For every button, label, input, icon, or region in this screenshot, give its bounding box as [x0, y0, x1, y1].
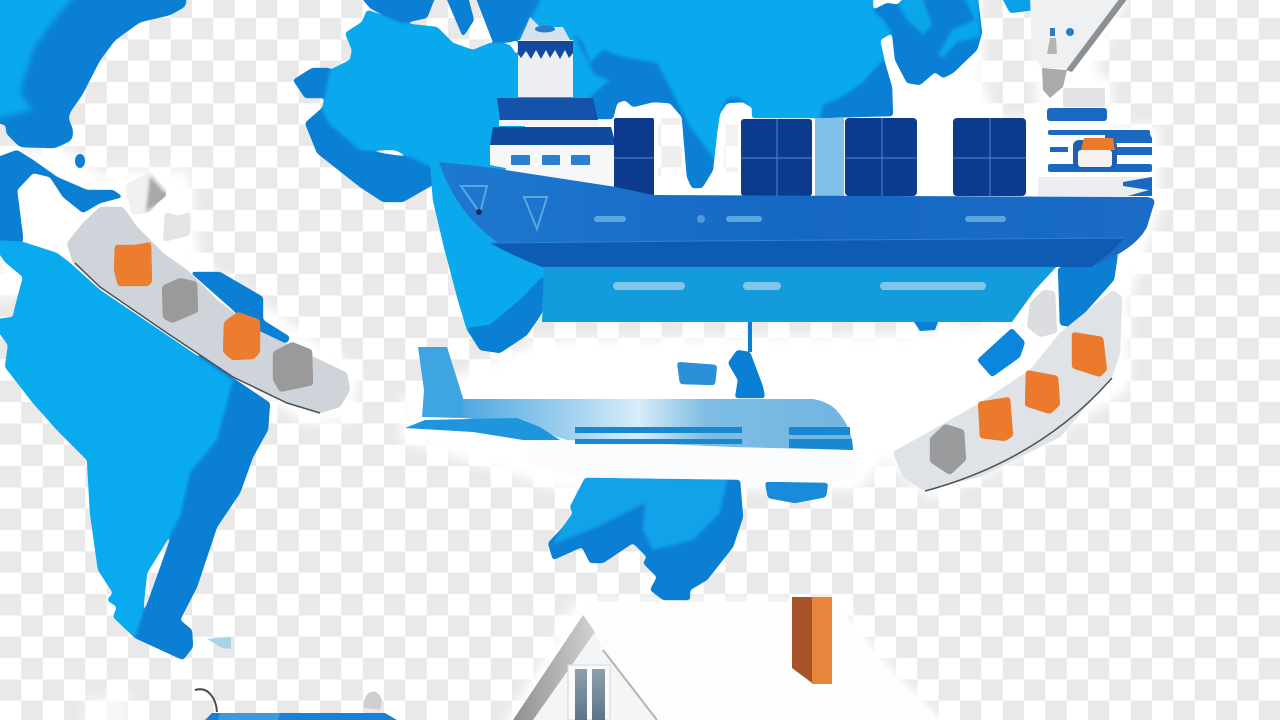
gable: [513, 615, 657, 720]
plane tail: [418, 347, 463, 418]
grey pillar parcel: [1027, 290, 1057, 337]
cargo plane: [405, 322, 858, 486]
gable window: [568, 665, 610, 720]
plane window panel: [677, 362, 717, 385]
map: South America: [0, 240, 270, 660]
orange parcel: [1025, 370, 1060, 414]
hull: [439, 162, 1154, 267]
conveyor tray: [67, 207, 350, 413]
container ship: [439, 17, 1154, 322]
map: North America: [0, 0, 186, 148]
fuselage stripes: [575, 427, 853, 450]
map: Central America: [0, 150, 123, 263]
fuselage: [463, 399, 853, 450]
map: Australia: [548, 478, 828, 600]
blue map fragment: [977, 328, 1025, 377]
plane white belly: [520, 438, 858, 486]
map: Caribbean islet: [75, 154, 85, 168]
bridge: [490, 98, 618, 190]
orange parcel: [978, 397, 1013, 441]
orange parcel: [223, 312, 260, 360]
map: Eurasia and Africa: [293, 0, 1118, 353]
orange parcel: [1072, 332, 1107, 377]
upper right conveyor fragment: [1030, 0, 1128, 98]
funnel: [518, 17, 573, 97]
grey parcel: [273, 342, 313, 392]
delivery van roof: [195, 689, 397, 720]
orange parcel: [114, 242, 152, 286]
stern structure: [1038, 88, 1152, 196]
left conveyor with cargo: [67, 172, 350, 413]
grey parcel: [930, 424, 966, 475]
right conveyor with cargo: [893, 280, 1122, 491]
grey parcel: [162, 278, 198, 323]
white and grey parcels: [125, 172, 190, 242]
dark tail fragment: [728, 350, 765, 398]
chimney: [792, 597, 832, 684]
conveyor tray: [893, 290, 1122, 490]
roof: [587, 602, 945, 720]
containers: [614, 118, 1026, 196]
house: [513, 597, 945, 720]
checkerboard showing through gaps near India: [658, 118, 738, 176]
pale island fragment: [207, 637, 231, 649]
ship reflection panel: [542, 265, 1058, 322]
tailplane: [405, 418, 560, 440]
